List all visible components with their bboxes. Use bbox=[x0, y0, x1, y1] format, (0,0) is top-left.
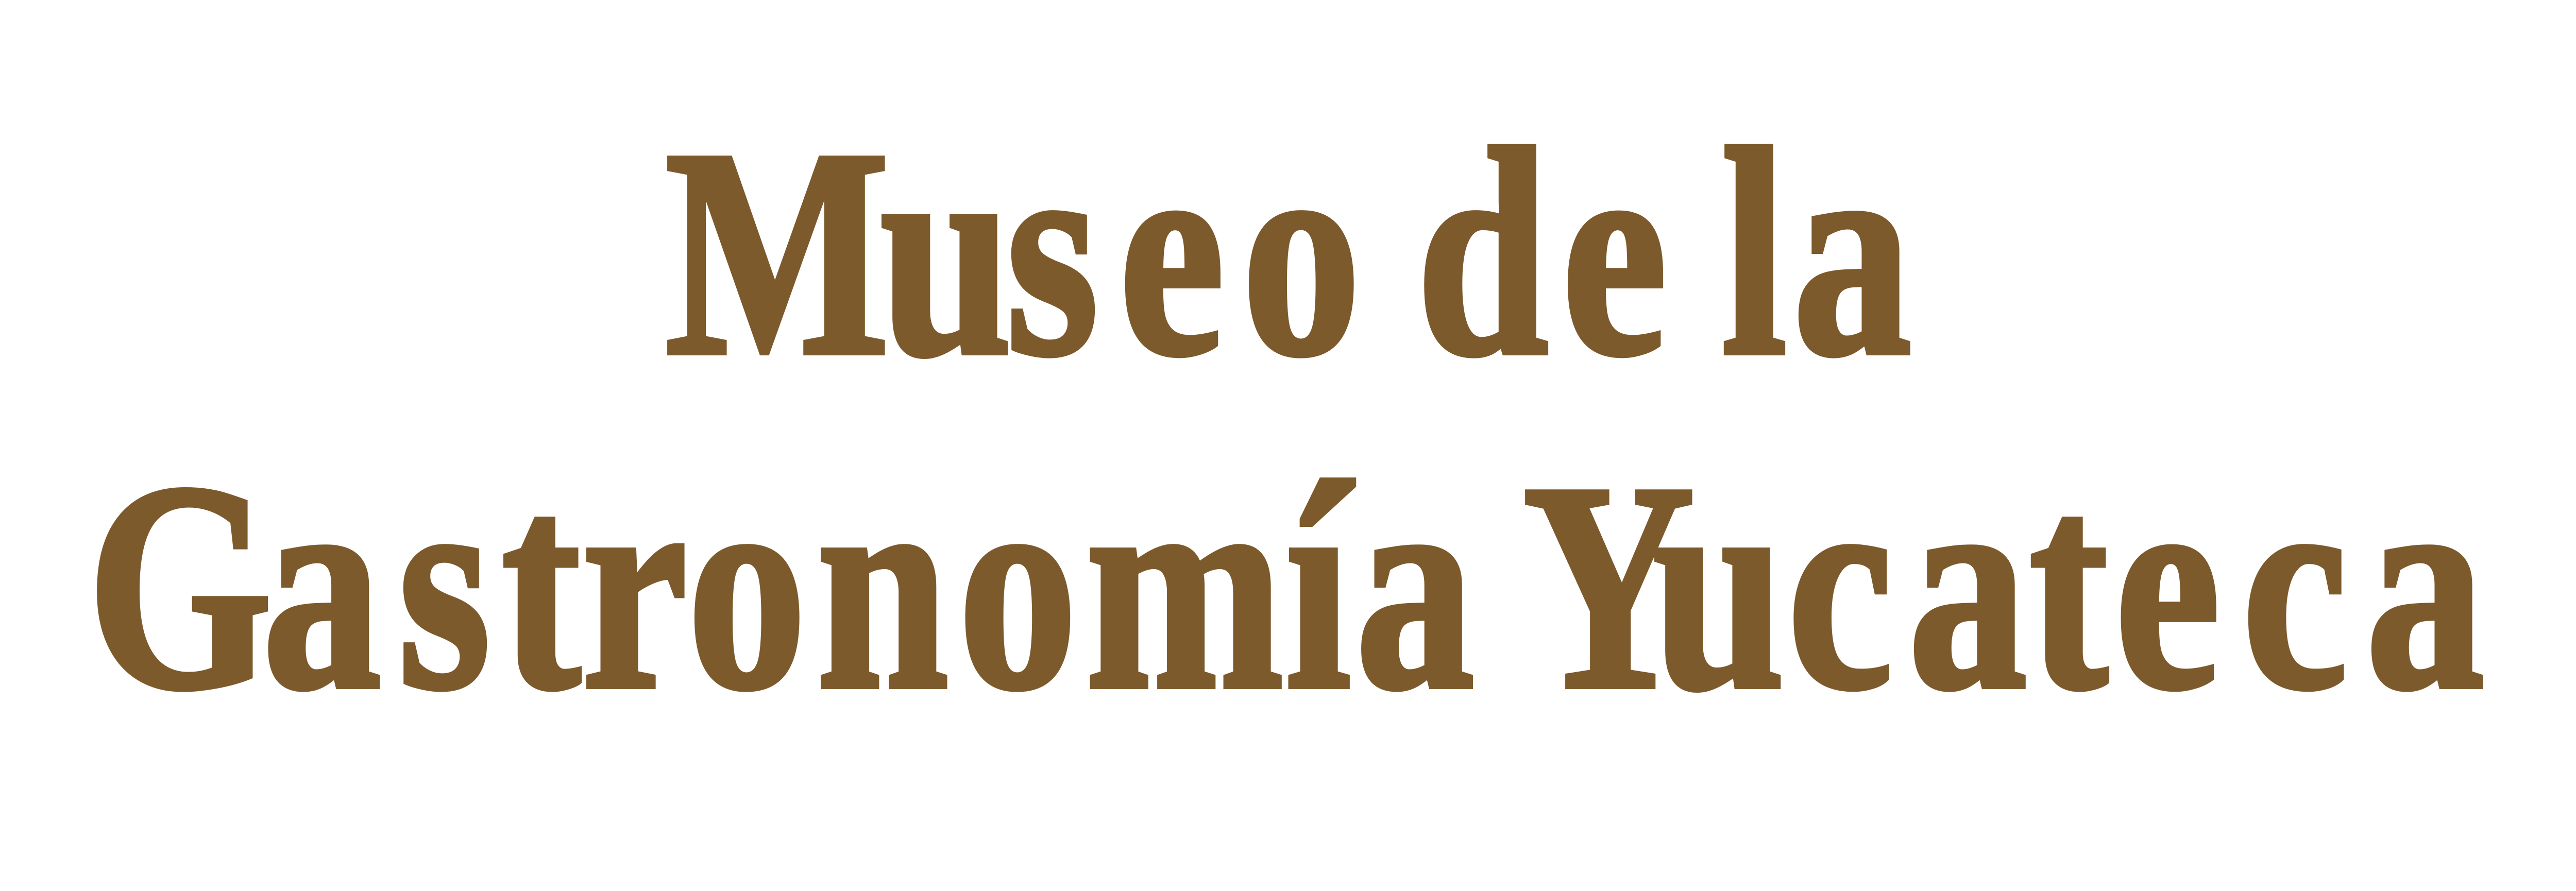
title line 2: Gastronomía Yucateca: Yucateca bbox=[1523, 422, 2485, 751]
title line 1: Museo de la: la bbox=[1721, 88, 1912, 418]
title line 1: Museo de la: de bbox=[1417, 88, 1667, 418]
title line 1: Museo de la: Museo bbox=[665, 88, 1361, 418]
title bbox=[88, 88, 2485, 751]
title line 1: Museo de la bbox=[665, 88, 1912, 418]
title line 2: Gastronomía Yucateca: Gastronomía bbox=[88, 422, 1475, 751]
title line 2: Gastronomía Yucateca bbox=[88, 422, 2485, 751]
